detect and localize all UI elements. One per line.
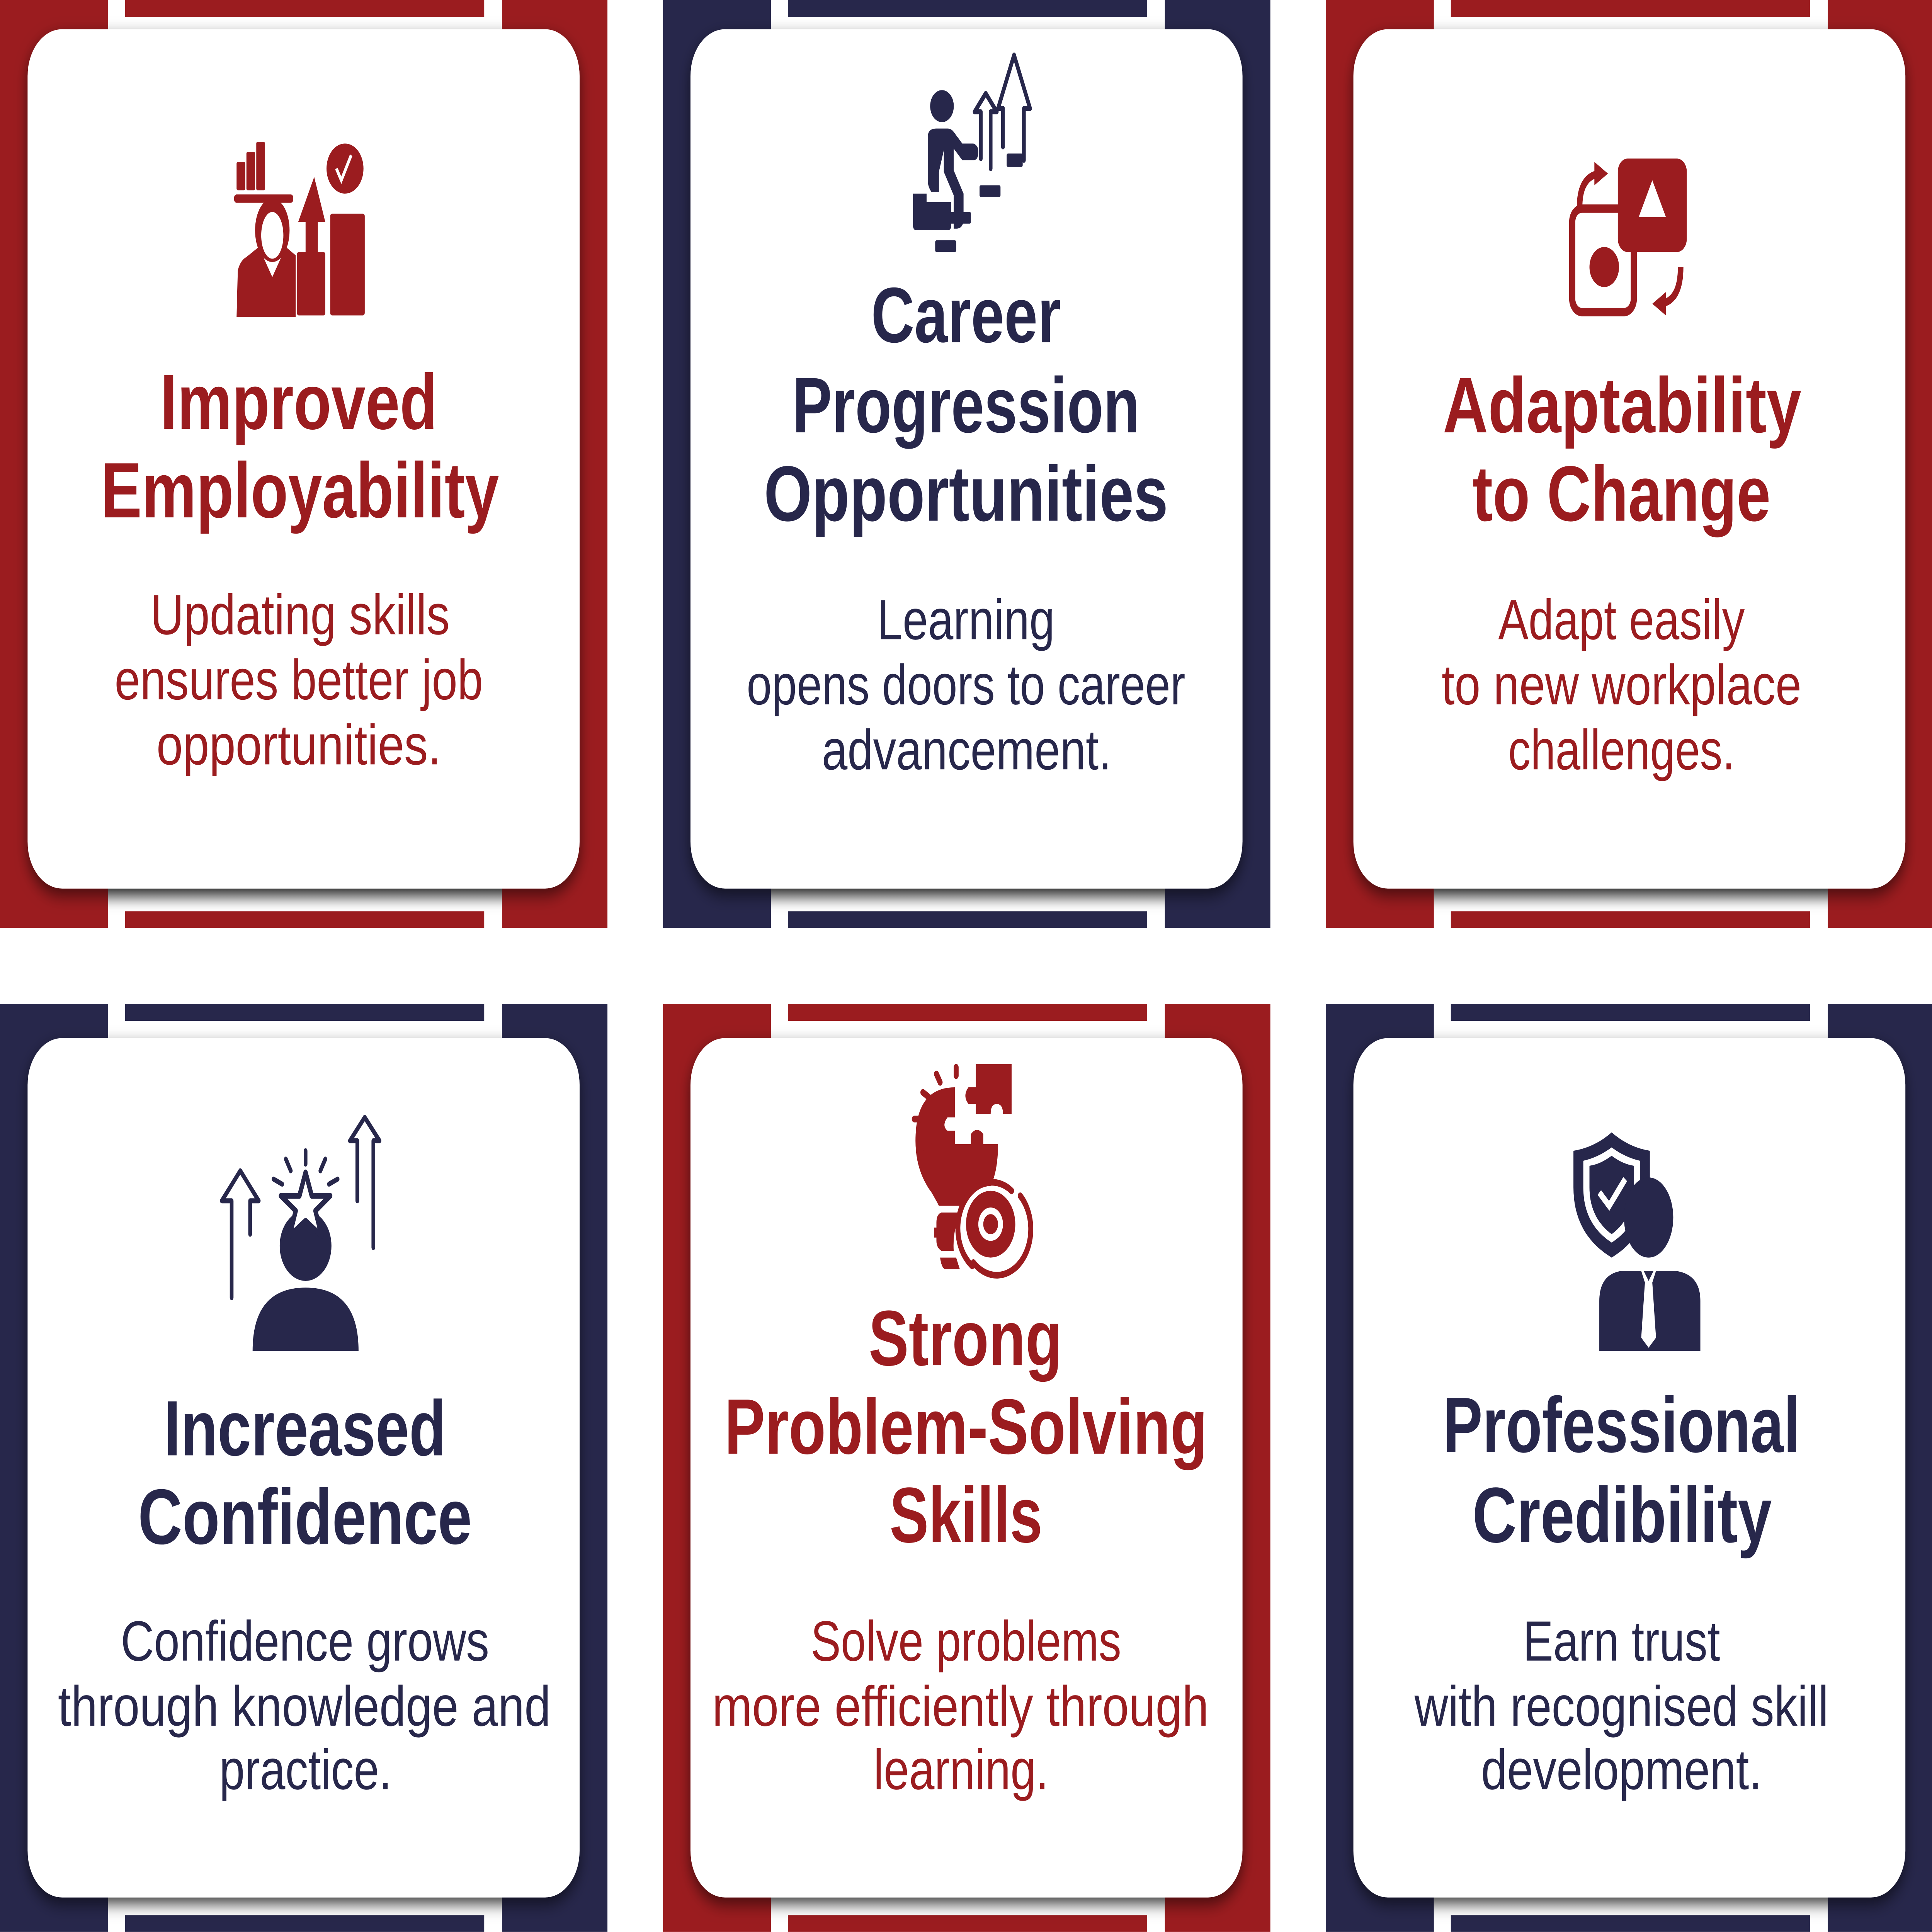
description: learning. — [874, 1738, 1049, 1801]
title — [101, 358, 499, 534]
title: Improved — [160, 358, 437, 446]
title: Confidence — [138, 1473, 472, 1561]
panel: increased confidence — [0, 1004, 607, 1932]
icon: confidence person — [222, 1117, 379, 1351]
title: Problem-Solving — [724, 1383, 1208, 1470]
panel: career progression — [663, 0, 1270, 928]
description: advancement. — [822, 718, 1111, 782]
title: Increased — [164, 1384, 446, 1472]
title: Adaptability — [1443, 361, 1801, 449]
description: Adapt easily — [1498, 588, 1745, 651]
description: Confidence grows — [121, 1610, 489, 1673]
title: to Change — [1473, 449, 1770, 537]
description: opens doors to career — [747, 653, 1185, 717]
description — [58, 1610, 551, 1801]
description — [1442, 588, 1801, 782]
icon: adaptability shapes — [1572, 158, 1687, 315]
title: Opportunities — [764, 449, 1168, 537]
description: with recognised skill — [1414, 1675, 1828, 1738]
description — [115, 583, 483, 777]
description: practice. — [219, 1738, 392, 1801]
icon: bulb puzzle gear — [914, 1064, 1031, 1275]
description: challenges. — [1508, 718, 1735, 782]
title: Career — [871, 271, 1061, 359]
title — [764, 271, 1168, 537]
description — [712, 1610, 1209, 1801]
description: ensures better job — [115, 648, 483, 712]
description: development. — [1481, 1738, 1762, 1801]
description: more efficiently through — [712, 1675, 1209, 1738]
title: Credibility — [1473, 1471, 1772, 1559]
description: through knowledge and — [58, 1675, 551, 1738]
icon: climbing stairs — [913, 90, 1023, 252]
description: to new workplace — [1442, 653, 1801, 717]
icon: shield and professional — [1573, 1133, 1701, 1351]
panel: problem-solving — [663, 1004, 1270, 1932]
description: Earn trust — [1523, 1610, 1720, 1673]
title — [1443, 1381, 1800, 1559]
title: Progression — [792, 361, 1140, 449]
title: Professional — [1443, 1381, 1800, 1469]
panel: adaptability — [1326, 0, 1932, 928]
description: Learning — [877, 588, 1055, 651]
description: opportunities. — [156, 713, 441, 777]
description — [747, 588, 1185, 782]
title — [138, 1384, 472, 1561]
title: Skills — [889, 1471, 1043, 1559]
title: Strong — [869, 1294, 1062, 1382]
description: Solve problems — [811, 1610, 1121, 1673]
title — [1443, 361, 1801, 537]
title — [724, 1294, 1208, 1559]
title: Employability — [101, 446, 499, 534]
description — [1414, 1610, 1828, 1801]
icon: employability growth — [234, 142, 365, 317]
panel: improved employability — [0, 0, 607, 928]
panel: professional credibility — [1326, 1004, 1932, 1932]
description: Updating skills — [150, 583, 450, 646]
